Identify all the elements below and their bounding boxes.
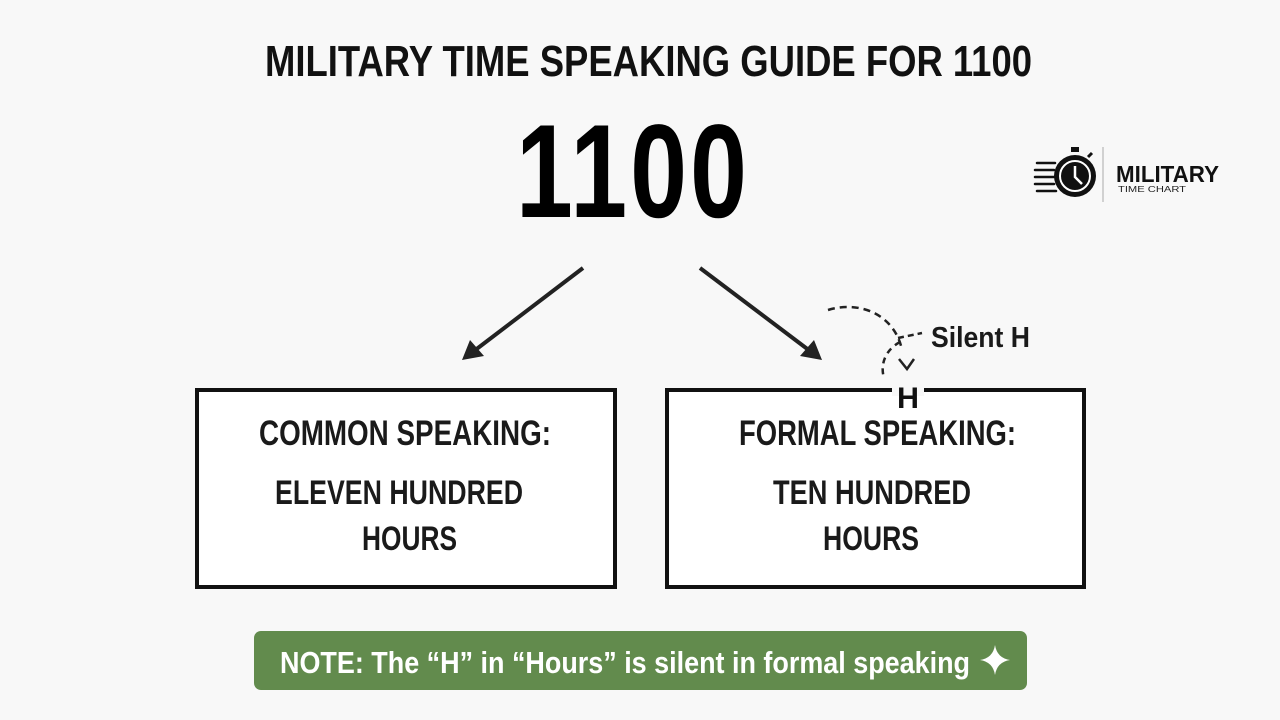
arrow: left <box>462 268 583 360</box>
silent H callout: Silent H <box>931 322 1030 354</box>
logo: military time chart: TIME CHART <box>1118 185 1186 194</box>
silent H callout: H <box>897 382 919 415</box>
panel: common speaking: COMMON SPEAKING: <box>259 414 551 453</box>
panel: formal speaking: TEN HUNDRED <box>773 474 971 512</box>
arrow: right <box>700 268 822 360</box>
panel: formal speaking <box>667 384 1084 587</box>
silent H callout <box>828 307 1030 415</box>
note banner: NOTE: The “H” in “Hours” is silent in formal speaking <box>280 645 970 680</box>
logo: military time chart: MILITARY <box>1116 161 1219 187</box>
panel: common speaking <box>197 390 615 587</box>
panel: common speaking: HOURS <box>362 520 457 558</box>
panel: common speaking: ELEVEN HUNDRED <box>275 474 523 512</box>
big number 1100: 1100 <box>516 98 750 246</box>
panel: formal speaking: FORMAL SPEAKING: <box>739 414 1016 453</box>
title: MILITARY TIME SPEAKING GUIDE FOR 1100 <box>265 37 1032 86</box>
panel: formal speaking: HOURS <box>823 520 919 558</box>
logo: military time chart <box>1035 147 1219 202</box>
note banner <box>254 631 1027 690</box>
